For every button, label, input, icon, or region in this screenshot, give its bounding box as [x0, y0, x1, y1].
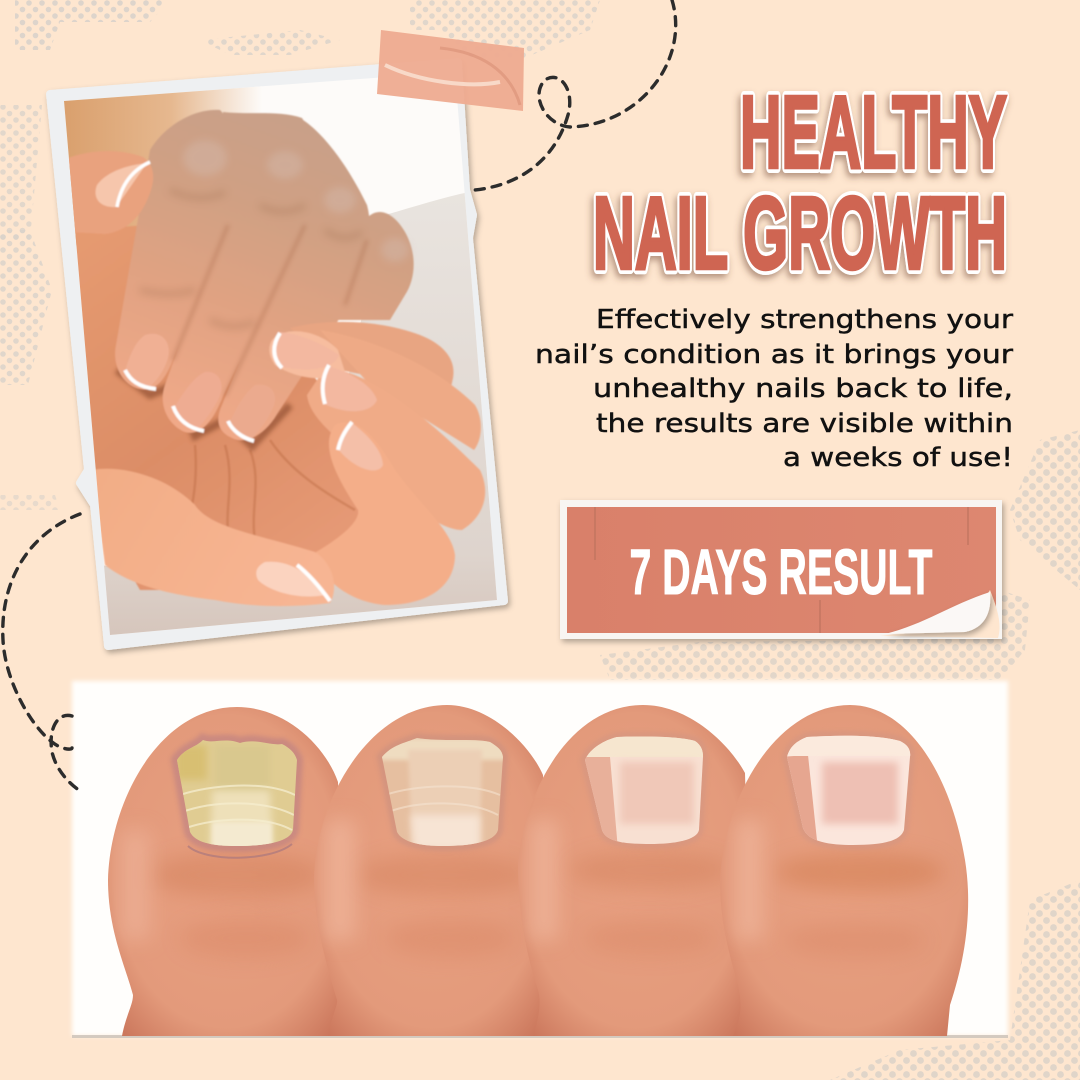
panel bottom edge	[72, 1035, 1008, 1038]
nail 1	[177, 740, 297, 846]
body text: Effectively strengthens your	[596, 305, 1014, 335]
dark gap beneath fingers	[117, 370, 290, 446]
toes panel	[72, 681, 1008, 1038]
nail 2	[382, 738, 503, 846]
right fingers	[269, 322, 485, 605]
nail 3	[585, 736, 703, 844]
dashed connector: top right	[475, 0, 676, 190]
middle right finger	[360, 374, 482, 450]
body text: nail’s condition as it brings your	[535, 340, 1014, 370]
back right finger	[295, 321, 454, 386]
nail finger	[269, 331, 345, 378]
photo card: hand with nails	[40, 60, 520, 650]
fourth finger	[335, 212, 414, 320]
nail 4	[787, 736, 910, 845]
finger separations	[173, 225, 367, 396]
toe 4: healthy	[720, 705, 968, 1036]
upper left finger	[68, 151, 153, 234]
body text	[535, 305, 1014, 473]
photo	[64, 78, 497, 635]
body text: the results are visible within	[596, 409, 1013, 439]
tape	[377, 30, 524, 111]
dashed connector: left	[3, 514, 80, 749]
heading	[593, 74, 1007, 290]
tan wall	[60, 84, 262, 250]
result badge	[560, 500, 1002, 639]
lower right finger	[307, 368, 485, 530]
towel	[100, 190, 510, 645]
palm creases	[192, 440, 355, 540]
palm base	[75, 226, 359, 591]
right thumb	[316, 422, 455, 605]
knuckle creases	[140, 190, 362, 326]
body text: a weeks of use!	[783, 443, 1013, 473]
fist fingers	[115, 110, 414, 440]
third finger	[218, 118, 370, 440]
hand group	[68, 110, 485, 606]
big thumb	[92, 469, 334, 606]
first finger	[115, 110, 234, 389]
photo backdrop	[103, 78, 464, 566]
knuckle highlights	[183, 140, 409, 262]
photo frame	[50, 62, 504, 646]
second finger	[163, 112, 317, 433]
body text: unhealthy nails back to life,	[593, 374, 1013, 404]
toe 1: damaged yellow nail	[108, 707, 345, 1036]
peeled corner	[880, 590, 1000, 638]
panel background	[72, 681, 1008, 1036]
dashed connector: left loop	[51, 715, 82, 792]
toe 2: early recovery	[314, 705, 550, 1036]
toe 3: improving	[518, 705, 752, 1036]
nails	[96, 162, 383, 601]
